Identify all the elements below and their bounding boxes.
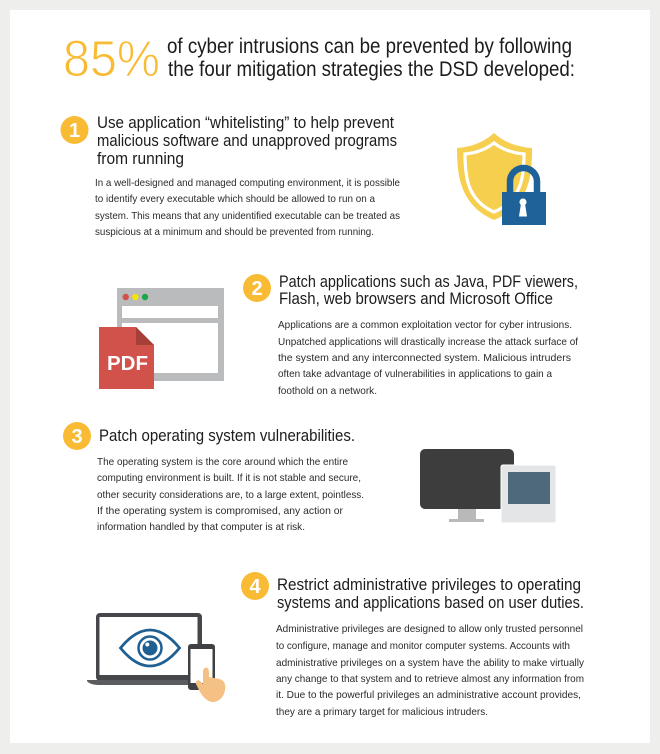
- panel: strategy 1: [60, 113, 546, 238]
- body text 1: [95, 177, 400, 238]
- body text 4: Administrative privileges are designed to allow only trusted personnel: [276, 623, 583, 635]
- icon: shield and padlock: [457, 133, 546, 225]
- body text 1: to identify every executable which should be allowed to run on a: [95, 193, 375, 205]
- body text 3: If the operating system is compromised, any action or: [97, 505, 343, 517]
- heading 1: from running: [97, 149, 184, 168]
- body text 2: foothold on a network.: [278, 385, 377, 397]
- body text 4: any change to that system and to retrieve almost any information from: [276, 673, 584, 685]
- number badge 1: [60, 116, 88, 144]
- heading 1: malicious software and unapproved programs: [97, 131, 397, 150]
- body text 1: system. This means that any unidentified executable can be treated as: [95, 210, 400, 222]
- panel: strategy 4: [87, 572, 585, 718]
- number badge 2: 2: [251, 278, 263, 300]
- body text 3: information handled by that computer is at risk.: [97, 521, 305, 533]
- title: the four mitigation strategies the DSD developed:: [168, 58, 575, 81]
- number badge 4: [241, 572, 269, 600]
- title: [63, 30, 575, 87]
- number badge 3: [63, 422, 91, 450]
- heading 4: Restrict administrative privileges to operating: [277, 575, 581, 594]
- panel: strategy 2: [99, 272, 578, 397]
- heading 4: [277, 575, 584, 612]
- number badge 2: [243, 274, 271, 302]
- body text 3: [97, 456, 364, 533]
- number badge 3: 3: [71, 426, 83, 448]
- icon: laptop, eye, phone and hand: [87, 613, 225, 702]
- body text 3: computing environment is built. If it is not stable and secure,: [97, 472, 361, 484]
- body text 4: to configure, manage and monitor computer systems. Accounts with: [276, 640, 570, 652]
- body text 4: they are a primary target for malicious intruders.: [276, 706, 488, 718]
- title: 85%: [63, 30, 160, 87]
- body text 1: In a well-designed and managed computing environment, it is possible: [95, 177, 400, 189]
- icon: browser window with PDF file: [99, 288, 224, 389]
- body text 2: Applications are a common exploitation vector for cyber intrusions.: [278, 319, 572, 331]
- body text 3: The operating system is the core around which the entire: [97, 456, 348, 468]
- number badge 4: 4: [249, 576, 261, 598]
- body text 2: [278, 319, 578, 397]
- body text 4: it. Due to the powerful privileges an administrative account provides,: [276, 689, 581, 701]
- icon: browser window with PDF file: PDF: [107, 353, 148, 375]
- body text 4: administrative privileges on a system have the ability to make virtually: [276, 657, 585, 669]
- heading 1: Use application “whitelisting” to help prevent: [97, 113, 394, 132]
- body text 2: Unpatched applications will drastically increase the attack surface of: [278, 336, 578, 348]
- heading 2: [279, 272, 578, 308]
- icon: monitor and tablet: [420, 449, 556, 523]
- panel: strategy 3: [63, 422, 556, 533]
- body text 3: other security considerations are, to a large extent, pointless.: [97, 489, 364, 501]
- heading 3: Patch operating system vulnerabilities.: [99, 426, 355, 445]
- heading 2: Patch applications such as Java, PDF viewers,: [279, 272, 578, 291]
- body text 2: the system and any interconnected system. Malicious intruders: [278, 352, 571, 364]
- title: of cyber intrusions can be prevented by following: [167, 35, 572, 58]
- body text 1: suspicious at a minimum and should be prevented from running.: [95, 226, 374, 238]
- number badge 1: 1: [69, 120, 80, 142]
- heading 2: Flash, web browsers and Microsoft Office: [279, 289, 553, 308]
- heading 1: [97, 113, 397, 168]
- body text 2: often take advantage of vulnerabilities in applications to gain a: [278, 368, 552, 380]
- heading 4: systems and applications based on user duties.: [277, 593, 584, 612]
- body text 4: [276, 623, 585, 718]
